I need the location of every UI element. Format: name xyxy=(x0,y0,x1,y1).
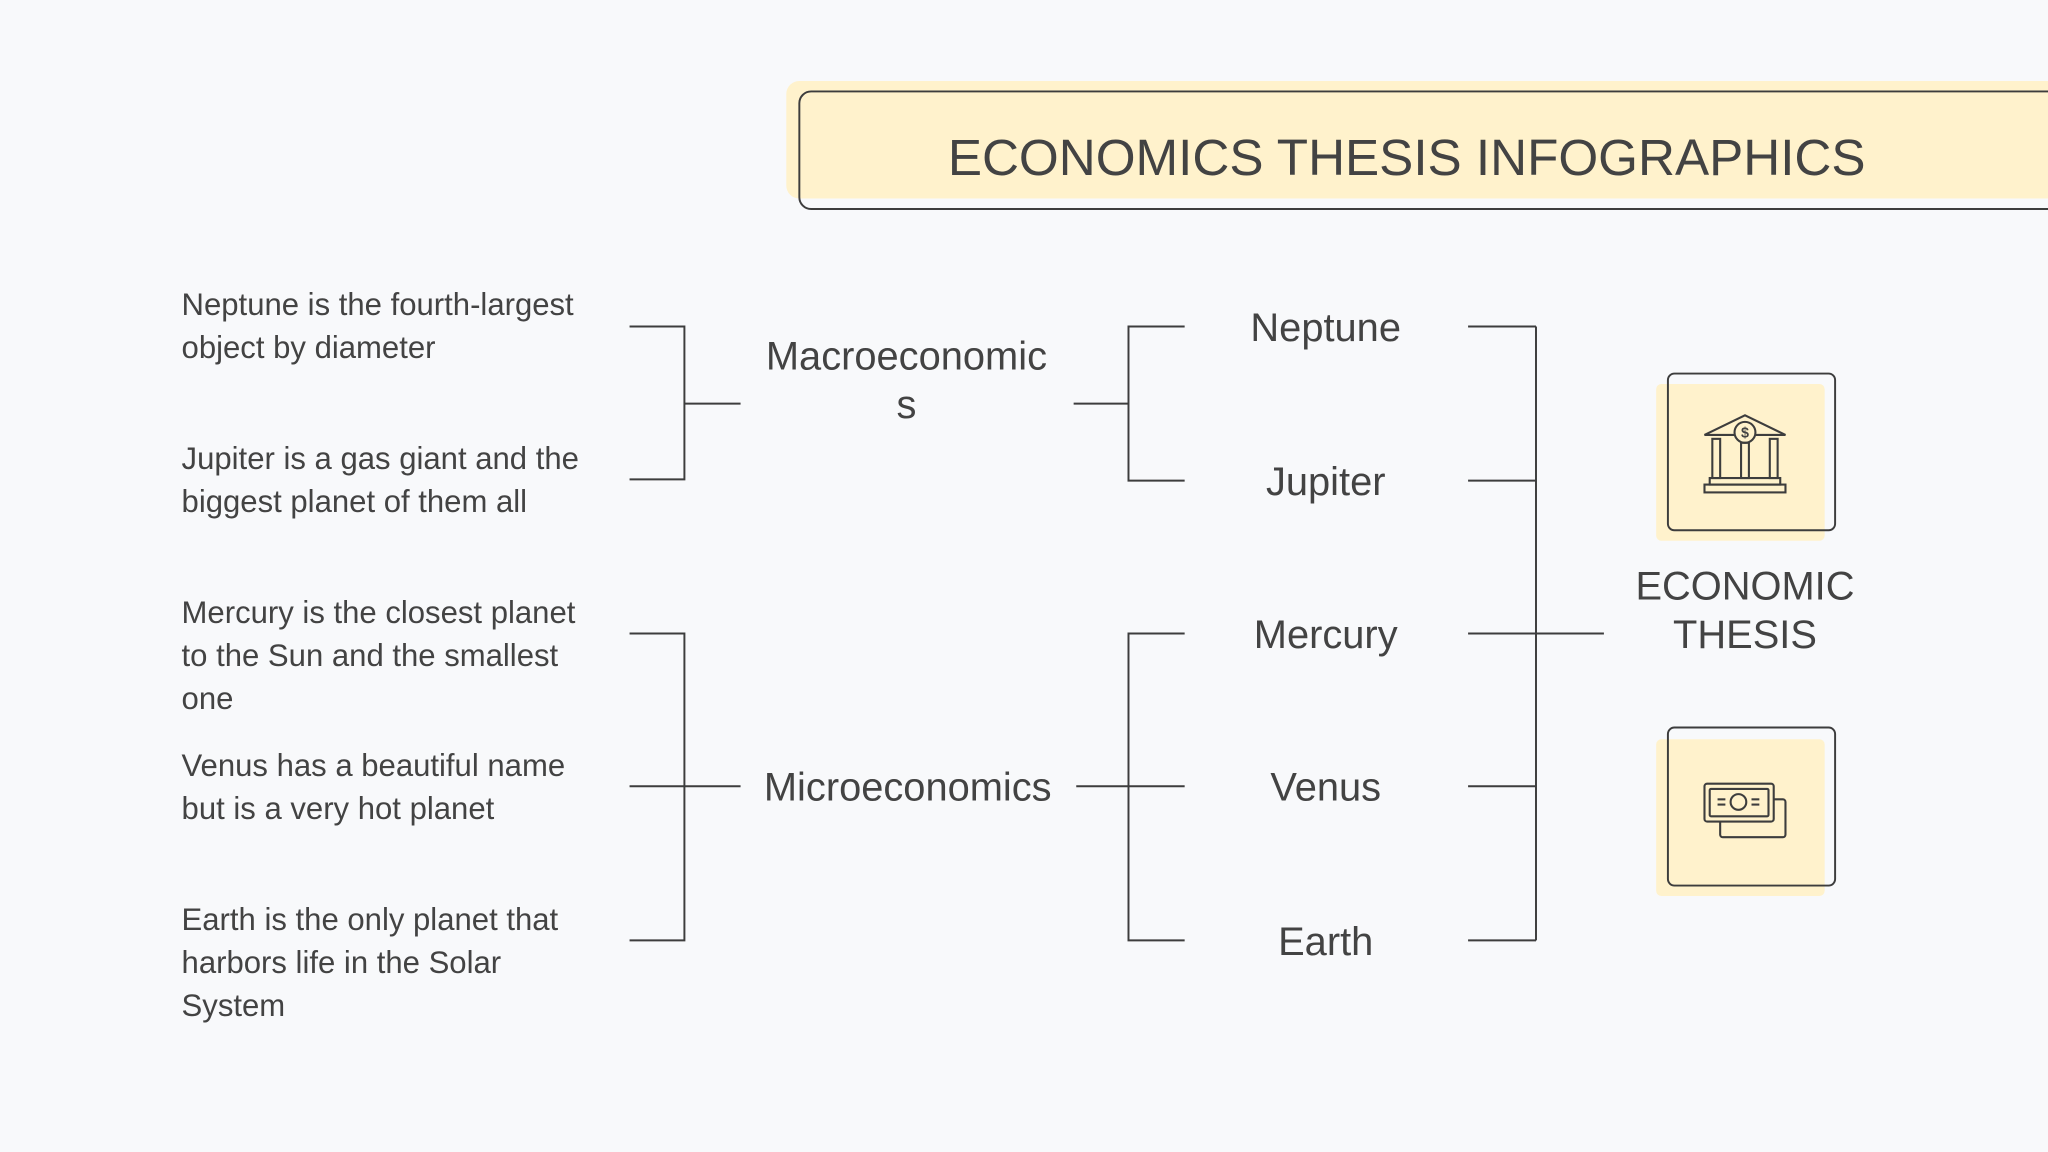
text block: descriptions: Venus has a beautiful name xyxy=(182,748,565,783)
title banner xyxy=(786,81,2048,209)
planet labels: Jupiter xyxy=(1266,460,1385,504)
text block: descriptions: Neptune is the fourth-largest xyxy=(182,287,574,322)
text block: descriptions: harbors life in the Solar xyxy=(182,945,501,980)
icon: bank: $ xyxy=(1741,426,1749,442)
category labels: s xyxy=(896,383,916,427)
label: economic thesis: ECONOMIC xyxy=(1635,565,1855,609)
text block: descriptions: one xyxy=(182,681,233,716)
category labels: Macroeconomic xyxy=(766,335,1047,379)
planet labels: Venus xyxy=(1270,766,1381,810)
category labels: Microeconomics xyxy=(764,766,1052,810)
planet labels: Neptune xyxy=(1250,306,1401,350)
label: economic thesis: THESIS xyxy=(1673,613,1817,657)
text block: descriptions: Jupiter is a gas giant and the xyxy=(182,441,579,476)
text block: descriptions: biggest planet of them all xyxy=(182,484,527,519)
planet labels: Earth xyxy=(1278,920,1373,964)
planet labels xyxy=(1250,306,1401,964)
planet labels: Mercury xyxy=(1254,613,1398,657)
text block: descriptions: to the Sun and the smallest xyxy=(182,638,559,673)
label: economic thesis xyxy=(1635,565,1855,657)
connector lines xyxy=(630,327,1604,940)
category labels xyxy=(764,335,1052,810)
text block: descriptions xyxy=(182,287,579,1023)
text block: descriptions: but is a very hot planet xyxy=(182,791,495,826)
text block: descriptions: Earth is the only planet that xyxy=(182,902,559,937)
text block: descriptions: Mercury is the closest planet xyxy=(182,595,576,630)
text block: descriptions: System xyxy=(182,988,285,1023)
title: ECONOMICS THESIS INFOGRAPHICS xyxy=(948,129,1866,186)
text block: descriptions: object by diameter xyxy=(182,330,435,365)
icon: bank xyxy=(1656,374,1835,541)
icon: money xyxy=(1656,728,1835,896)
